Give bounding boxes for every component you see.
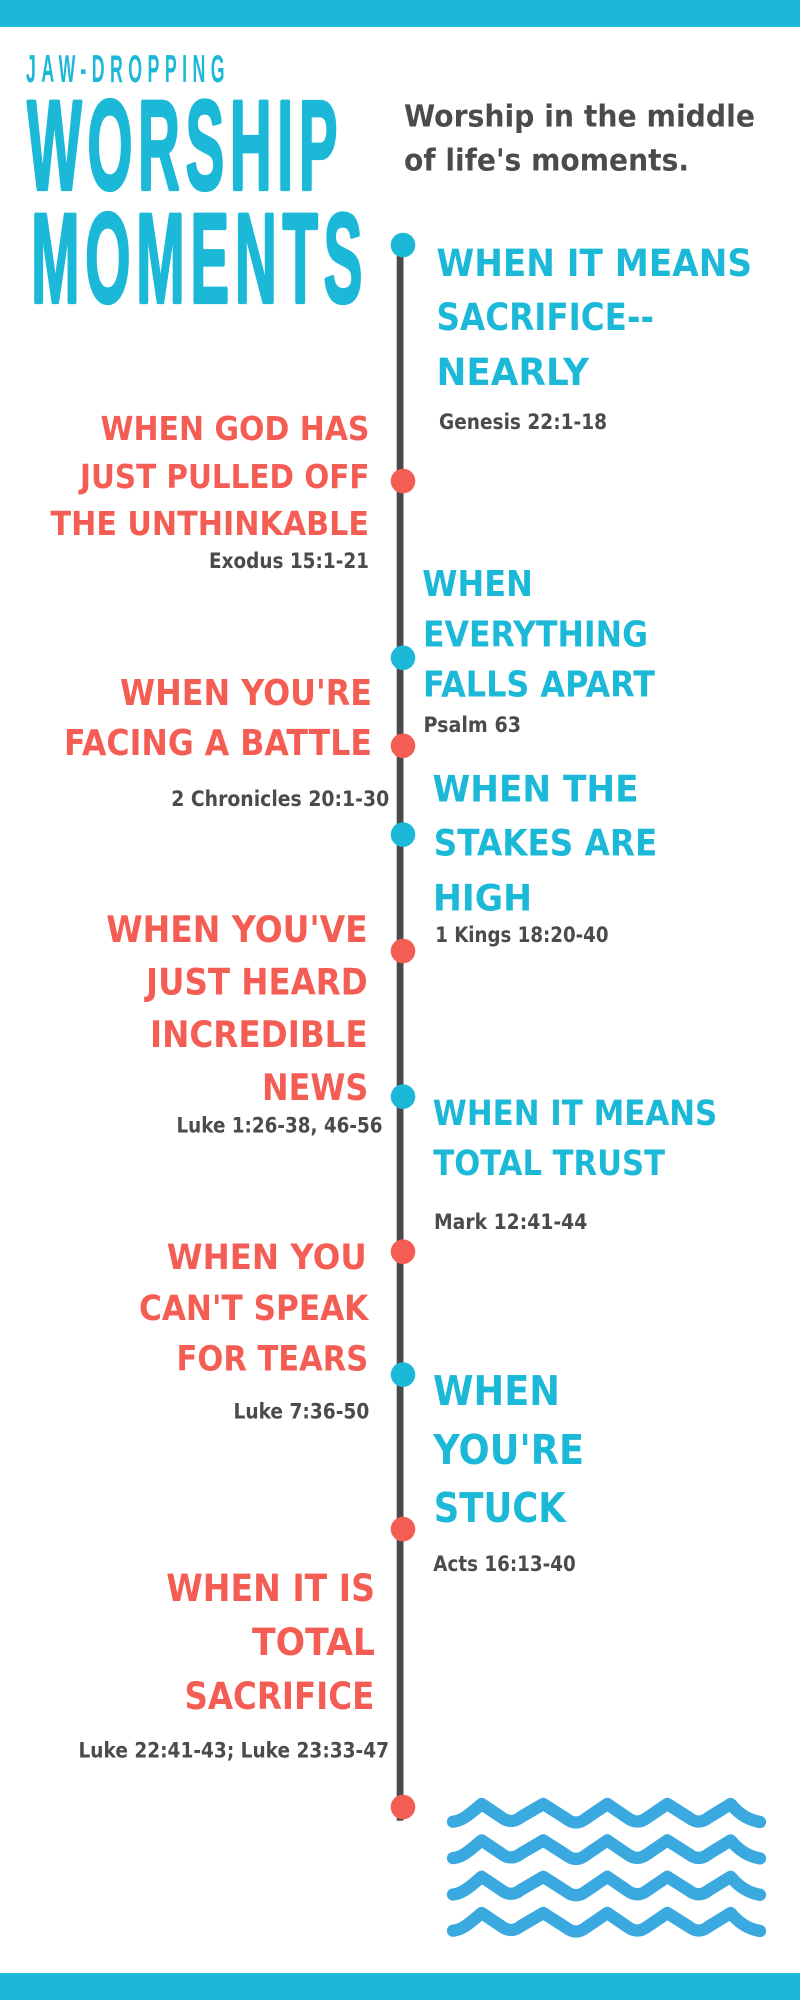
moment: when the stakes are high: HIGH [433, 877, 532, 920]
moment: when you're stuck [432, 1367, 584, 1577]
moment: when everything falls apart [422, 564, 655, 738]
moment: when it means sacrifice nearly: NEARLY [436, 350, 590, 394]
icon: waves [453, 1804, 760, 1932]
moment: when the stakes are high: STAKES ARE [434, 822, 657, 865]
timeline dots [391, 233, 415, 1819]
timeline [391, 233, 415, 1821]
moment: when you're facing a battle: WHEN YOU'RE [120, 673, 372, 714]
moment: when it means total trust [433, 1094, 717, 1235]
moment: when you've just heard incredible news: NEWS [262, 1066, 368, 1109]
bottom bar [0, 1973, 800, 2000]
moment: when god has just pulled off the unthinkable: JUST PULLED OFF [78, 457, 370, 496]
moment: when you're stuck: STUCK [434, 1484, 568, 1532]
moment: when it means total trust: TOTAL TRUST [433, 1144, 665, 1184]
top bar [0, 0, 800, 27]
moment: when you're stuck: YOU'RE [432, 1426, 584, 1474]
moment: when you're facing a battle: 2 Chronicles 20:1-30 [171, 787, 389, 812]
moment: when it is total sacrifice: TOTAL [252, 1620, 375, 1664]
moment: when god has just pulled off the unthinkable: Exodus 15:1-21 [209, 549, 369, 574]
moment: when everything falls apart: Psalm 63 [424, 713, 521, 738]
moment: when god has just pulled off the unthinkable: THE UNTHINKABLE [50, 504, 369, 543]
infographic: MOMENTS [31, 188, 368, 330]
moment: when it is total sacrifice: SACRIFICE [184, 1674, 374, 1718]
moment: when it means sacrifice nearly: SACRIFICE-- [436, 295, 654, 339]
moment: when you're facing a battle: FACING A BATTLE [64, 723, 372, 764]
timeline line [397, 250, 404, 1821]
subtitle: of life's moments. [404, 144, 689, 179]
moment: when you can't speak for tears: CAN'T SPEAK [139, 1289, 370, 1329]
moment: when you can't speak for tears [139, 1238, 370, 1425]
moment: when you've just heard incredible news: Luke 1:26-38, 46-56 [176, 1114, 382, 1139]
moment: when everything falls apart: WHEN [422, 564, 533, 605]
moment: when it means sacrifice nearly: Genesis 22:1-18 [439, 410, 607, 435]
infographic: WORSHIP [27, 74, 343, 218]
moment: when you've just heard incredible news: WHEN YOU'VE [106, 908, 368, 951]
moment: when you've just heard incredible news: INCREDIBLE [150, 1013, 368, 1056]
moment: when you're stuck: WHEN [433, 1367, 560, 1415]
moment: when you've just heard incredible news: JUST HEARD [143, 960, 368, 1003]
moment: when you can't speak for tears: WHEN YOU [167, 1238, 367, 1278]
moment: when everything falls apart: EVERYTHING [423, 615, 648, 656]
moment: when you're stuck: Acts 16:13-40 [433, 1552, 576, 1577]
moment: when god has just pulled off the unthinkable [50, 409, 370, 574]
moment: when it means total trust: Mark 12:41-44 [434, 1210, 587, 1235]
title [26, 48, 368, 330]
subtitle: Worship in the middle [404, 100, 755, 135]
moment: when it means sacrifice nearly: WHEN IT MEANS [436, 241, 752, 285]
moment: when it is total sacrifice [78, 1566, 389, 1764]
moment: when you can't speak for tears: Luke 7:36-50 [234, 1400, 369, 1425]
moment: when it is total sacrifice: Luke 22:41-43; Luke 23:33-47 [78, 1739, 389, 1764]
moment: when the stakes are high [432, 768, 657, 948]
title: JAW-DROPPING [26, 48, 230, 91]
moment: when the stakes are high: 1 Kings 18:20-40 [435, 923, 608, 948]
moment: when it means total trust: WHEN IT MEANS [433, 1094, 717, 1134]
subtitle [404, 100, 755, 179]
moment: when you can't speak for tears: FOR TEARS [176, 1340, 368, 1380]
moment: when it means sacrifice nearly [436, 241, 752, 435]
moment: when the stakes are high: WHEN THE [432, 768, 638, 811]
moment: when god has just pulled off the unthinkable: WHEN GOD HAS [100, 409, 370, 448]
moment: when you've just heard incredible news [106, 908, 382, 1139]
moment: when it is total sacrifice: WHEN IT IS [166, 1566, 375, 1610]
moment: when you're facing a battle [64, 673, 389, 812]
moment: when everything falls apart: FALLS APART [423, 665, 655, 706]
